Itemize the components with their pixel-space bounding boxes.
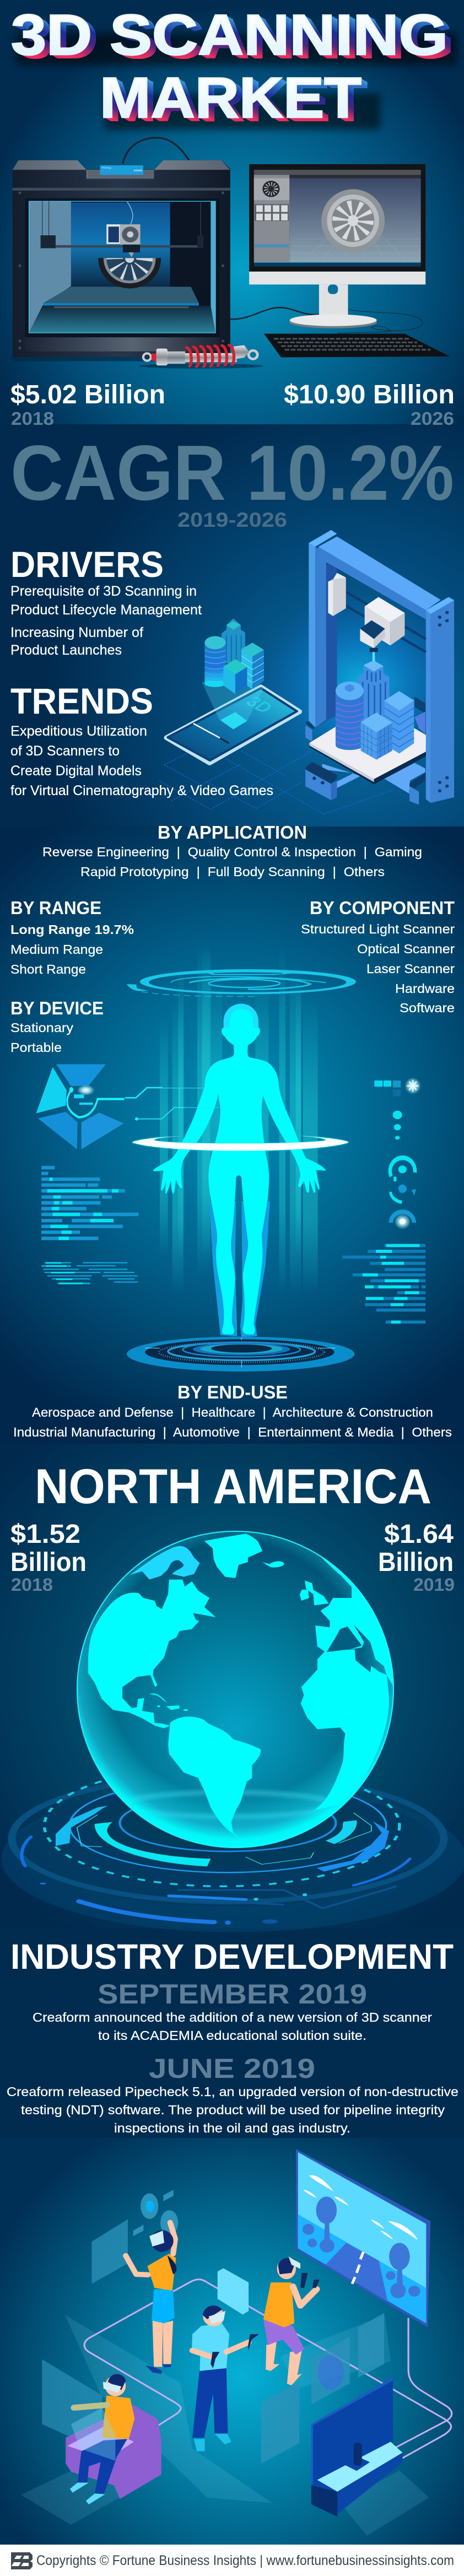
illustration: hud elements right bbox=[342, 1077, 425, 1324]
outer dashes bbox=[45, 1765, 400, 1886]
title: 3D SCANNING bbox=[11, 3, 448, 67]
segment: by range: BY RANGE bbox=[10, 898, 101, 918]
segment: by range: Long Range 19.7% bbox=[10, 922, 134, 937]
timeline entry: september 2019 bbox=[33, 1979, 432, 2043]
text: driver list: Product Lifecycle Management bbox=[10, 602, 202, 618]
blue wedges bbox=[56, 1806, 110, 1846]
rear rails bbox=[305, 696, 425, 730]
segment: by component bbox=[301, 898, 455, 1015]
seated man on sofa bbox=[42, 2359, 161, 2504]
segment: by component: BY COMPONENT bbox=[310, 898, 455, 918]
frame bbox=[326, 564, 337, 721]
footer bar bbox=[0, 2545, 464, 2576]
timeline entry: september 2019: SEPTEMBER 2019 bbox=[98, 1979, 367, 2010]
segment: by device: Portable bbox=[10, 1040, 62, 1055]
stat: 2018 market value: 2018 bbox=[11, 408, 54, 429]
segment: by application: BY APPLICATION bbox=[158, 822, 307, 843]
timeline entry: june 2019: inspections in the oil and gas industry. bbox=[114, 2121, 350, 2135]
heading: trends: TRENDS bbox=[10, 681, 153, 721]
background: vr scene section bbox=[0, 2138, 464, 2546]
human silhouette bbox=[153, 1004, 326, 1335]
stat: north america 2018: 2018 bbox=[11, 1575, 53, 1595]
stat: 2026 market value: 2026 bbox=[411, 408, 454, 429]
segment: by device: Stationary bbox=[10, 1020, 74, 1035]
segment: by application: Reverse Engineering | Quality Control & Inspection | Gaming bbox=[42, 845, 422, 859]
man playing in front of the screen bbox=[263, 2256, 320, 2385]
illustration: smartphone projecting a 3D city: 3D bbox=[241, 693, 277, 716]
segment: by end-use: Aerospace and Defense | Healthcare | Architecture & Construction bbox=[32, 1405, 433, 1419]
segment: by component: Laser Scanner bbox=[366, 962, 455, 976]
text: driver list: Prerequisite of 3D Scanning in bbox=[10, 584, 197, 599]
stat: north america 2019 bbox=[378, 1520, 455, 1595]
stat: 2026 market value: $10.90 Billion bbox=[284, 380, 455, 409]
title: 3D SCANNING bbox=[11, 3, 448, 67]
timeline entry: june 2019: testing (NDT) software. The product will be used for pipeline integrity bbox=[21, 2103, 445, 2117]
stat: CAGR: 2019-2026 bbox=[177, 509, 287, 531]
stat: north america 2018: Billion bbox=[10, 1548, 87, 1577]
segment: by end-use: Industrial Manufacturing | Automotive | Entertainment & Media | Others bbox=[13, 1425, 452, 1439]
segment: by range bbox=[10, 898, 134, 976]
cables bbox=[84, 2280, 452, 2458]
segment: by component: Software bbox=[400, 1001, 455, 1015]
text: driver list: Increasing Number of bbox=[10, 625, 143, 640]
timeline entry: september 2019: to its ACADEMIA educational solution suite. bbox=[98, 2028, 366, 2043]
illustration: 3D printer: Printing... bbox=[102, 166, 113, 169]
scanning ring bbox=[132, 1136, 349, 1151]
icon: fortune business insights logo bbox=[11, 2552, 33, 2569]
segment: by component: Hardware bbox=[395, 981, 455, 996]
illustration: body scanner bbox=[125, 944, 356, 1337]
text: driver list bbox=[10, 584, 202, 658]
stat: 2026 market value bbox=[284, 380, 455, 429]
segment: by application bbox=[42, 822, 422, 879]
background: industry development section bbox=[0, 1929, 464, 2149]
stat: north america 2019: 2019 bbox=[413, 1575, 455, 1595]
stat: 2018 market value: $5.02 Billion bbox=[10, 380, 165, 409]
wall screen bbox=[296, 2149, 430, 2327]
woman with VR headset bbox=[91, 2190, 178, 2374]
segment: by range: Short Range bbox=[10, 962, 86, 976]
carriage bbox=[328, 573, 346, 616]
text: trend list: for Virtual Cinematography & Video Games bbox=[10, 783, 273, 798]
text: trend list: Create Digital Models bbox=[10, 763, 142, 779]
segment: by range: Medium Range bbox=[10, 942, 103, 957]
stat: north america 2019: $1.64 bbox=[384, 1520, 454, 1549]
text: trend list: of 3D Scanners to bbox=[10, 743, 120, 759]
timeline entry: june 2019: Creaform released Pipecheck 5.1, an upgraded version of non-destructive bbox=[7, 2084, 458, 2099]
illustration: 3D printer bbox=[9, 138, 234, 361]
heading: industry development: INDUSTRY DEVELOPMENT bbox=[10, 1937, 454, 1976]
timeline entry: june 2019 bbox=[7, 2053, 458, 2135]
top scanner disc bbox=[127, 969, 356, 997]
stat: north america 2018 bbox=[10, 1520, 87, 1595]
cyan crescents bbox=[95, 1822, 211, 1866]
text: trend list bbox=[10, 723, 273, 798]
segment: by end-use bbox=[13, 1382, 452, 1439]
floor grid bbox=[159, 750, 393, 814]
illustration: computer monitor and keyboard bbox=[230, 164, 450, 357]
lower blue arcs bbox=[21, 1837, 410, 1886]
body shadow layer bbox=[209, 1201, 270, 1337]
man standing with controllers bbox=[192, 2305, 259, 2451]
television on stand bbox=[311, 2377, 402, 2516]
segment: by end-use: BY END-USE bbox=[177, 1382, 288, 1402]
segment: by device: BY DEVICE bbox=[10, 998, 104, 1018]
background: north america section bbox=[0, 1444, 464, 1929]
stat: 2018 market value bbox=[10, 380, 165, 429]
rods bbox=[339, 588, 426, 652]
printed city bbox=[358, 661, 389, 727]
illustration: hud elements left bbox=[36, 1064, 138, 1284]
segment: by application: Rapid Prototyping | Full Body Scanning | Others bbox=[80, 865, 385, 879]
illustration: shock absorber bbox=[139, 345, 263, 369]
background: segments section bbox=[0, 827, 464, 1444]
print bed bbox=[309, 743, 374, 784]
illustration: isometric 3D printer building a city bbox=[159, 530, 464, 814]
background: drivers and trends section bbox=[0, 424, 464, 827]
title bbox=[11, 3, 457, 130]
segment: by component: Structured Light Scanner bbox=[301, 922, 455, 936]
stat: north america 2018: $1.52 bbox=[10, 1520, 80, 1549]
title: MARKET bbox=[100, 66, 362, 130]
heading: drivers: DRIVERS bbox=[10, 544, 164, 585]
segment: by device bbox=[10, 998, 104, 1055]
illustration: hologram platform bbox=[2, 1765, 464, 1932]
floating panels right bbox=[261, 2313, 384, 2464]
illustration: smartphone projecting a 3D city bbox=[166, 618, 299, 763]
illustration: floor scanner disc bbox=[127, 1337, 354, 1371]
segment: by component: Optical Scanner bbox=[357, 942, 455, 956]
illustration: virtual reality scene bbox=[21, 2149, 452, 2536]
background: market overview section bbox=[0, 0, 464, 424]
stat: north america 2019: Billion bbox=[378, 1548, 454, 1577]
timeline entry: june 2019: JUNE 2019 bbox=[149, 2053, 315, 2084]
text: trend list: Expeditious Utilization bbox=[10, 723, 147, 739]
thin circuit lines bbox=[77, 1813, 371, 1864]
foot pieces bbox=[322, 764, 361, 788]
heading: north america: NORTH AMERICA bbox=[35, 1459, 431, 1514]
illustration: glowing globe bbox=[77, 1531, 394, 1848]
title: MARKET bbox=[100, 66, 362, 130]
illustration: 3D printer: START bbox=[134, 169, 143, 172]
text: driver list: Product Launches bbox=[10, 642, 122, 658]
circuit lines bbox=[125, 1088, 219, 1121]
server box bbox=[218, 2269, 249, 2315]
timeline entry: september 2019: Creaform announced the addition of a new version of 3D scanner bbox=[33, 2010, 432, 2024]
